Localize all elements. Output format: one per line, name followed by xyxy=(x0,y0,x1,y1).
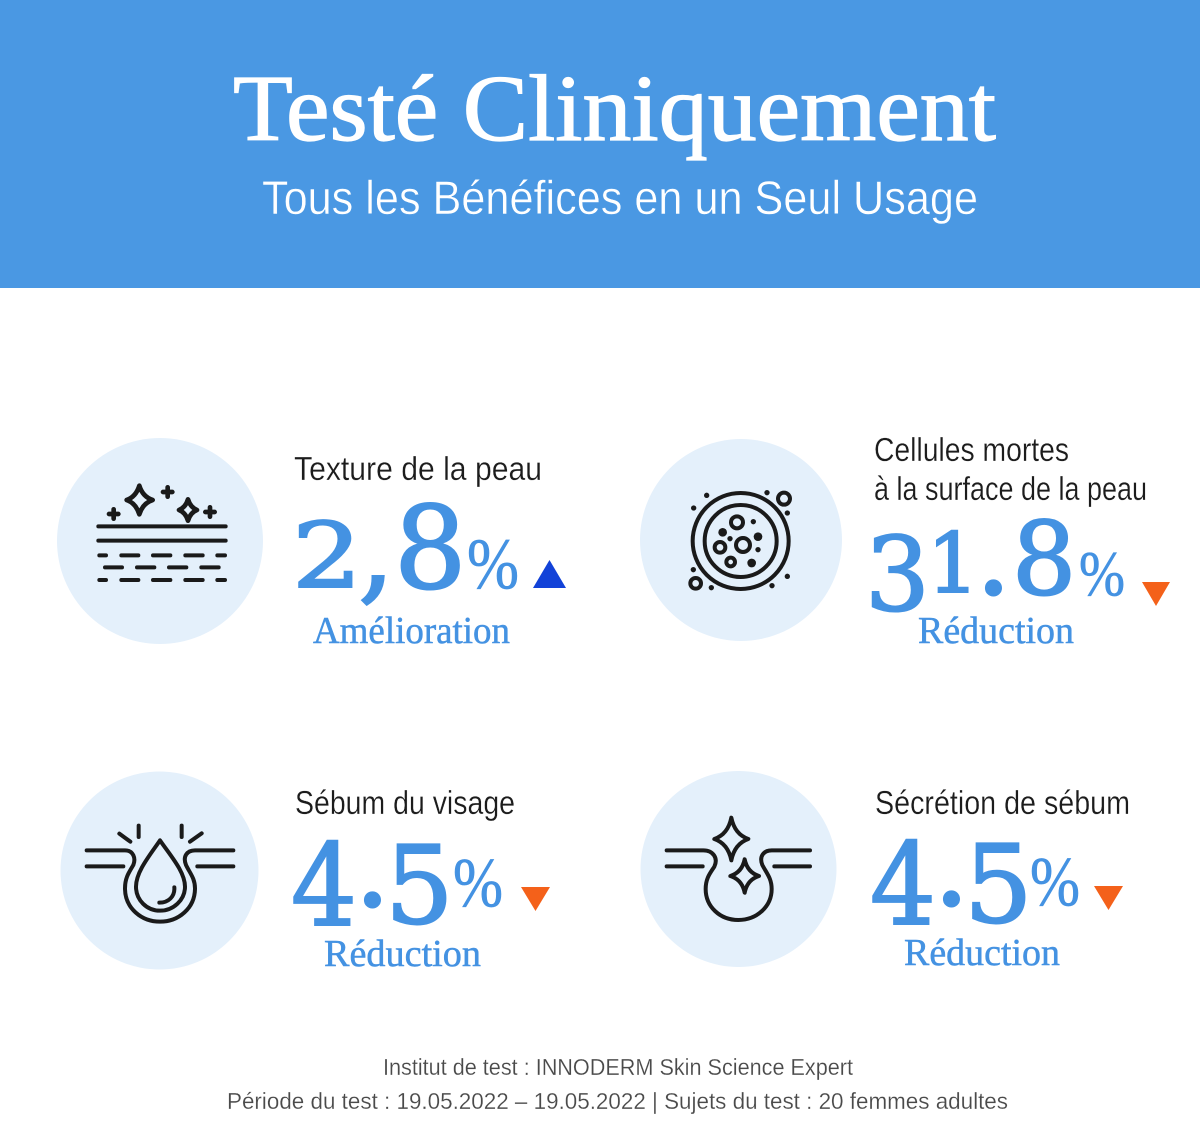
label: Sébum du visage xyxy=(295,784,515,821)
arrow: down xyxy=(521,887,550,911)
value: 8 xyxy=(394,482,467,615)
icon: sebum drop in pore xyxy=(60,772,258,970)
value: 1 xyxy=(927,517,979,612)
percent sign: % xyxy=(453,845,503,922)
caption: Réduction xyxy=(918,610,1074,652)
value xyxy=(865,487,1076,635)
header banner xyxy=(0,0,1200,288)
percent sign: % xyxy=(1079,538,1125,609)
value: , xyxy=(358,482,395,617)
icon: skin texture with sparkles xyxy=(57,438,263,644)
value: . xyxy=(975,487,1012,622)
value: 5 xyxy=(385,824,454,949)
footer notes: Institut de test : INNODERM Skin Science Expert xyxy=(383,1054,854,1080)
value xyxy=(870,798,1033,951)
caption: Réduction xyxy=(324,933,481,975)
value xyxy=(292,482,467,617)
footer notes xyxy=(227,1054,1008,1114)
value: 2 xyxy=(292,504,362,609)
icon: pore with sparkles xyxy=(640,771,836,967)
value: 4 xyxy=(870,819,936,951)
value: . xyxy=(354,799,391,934)
panel: sécrétion de sébum xyxy=(640,771,1130,974)
panel: sébum du visage xyxy=(60,772,550,975)
arrow: up xyxy=(533,560,566,588)
panel: cellules mortes xyxy=(640,431,1170,652)
caption: Amélioration xyxy=(313,610,510,652)
label: Cellules mortes xyxy=(874,431,1069,468)
label xyxy=(874,431,1147,507)
caption: Réduction xyxy=(904,932,1060,974)
panel: texture de la peau xyxy=(57,438,566,652)
title: Testé Cliniquement xyxy=(233,57,996,161)
label: à la surface de la peau xyxy=(874,470,1147,507)
icon: dead skin cells xyxy=(640,439,842,641)
percent sign: % xyxy=(467,524,519,604)
percent sign: % xyxy=(1030,844,1080,921)
value: 3 xyxy=(865,516,930,635)
value: 5 xyxy=(964,823,1033,948)
label: Sécrétion de sébum xyxy=(875,784,1130,821)
arrow: down xyxy=(1094,886,1123,910)
footer notes: Période du test : 19.05.2022 – 19.05.2022 | Sujets du test : 20 femmes adultes xyxy=(227,1088,1008,1114)
value: 4 xyxy=(291,820,357,952)
value xyxy=(291,799,454,952)
value: 8 xyxy=(1012,500,1076,618)
value: . xyxy=(933,798,970,933)
label: Texture de la peau xyxy=(294,450,542,487)
subtitle: Tous les Bénéfices en un Seul Usage xyxy=(262,171,978,224)
arrow: down xyxy=(1142,582,1170,606)
